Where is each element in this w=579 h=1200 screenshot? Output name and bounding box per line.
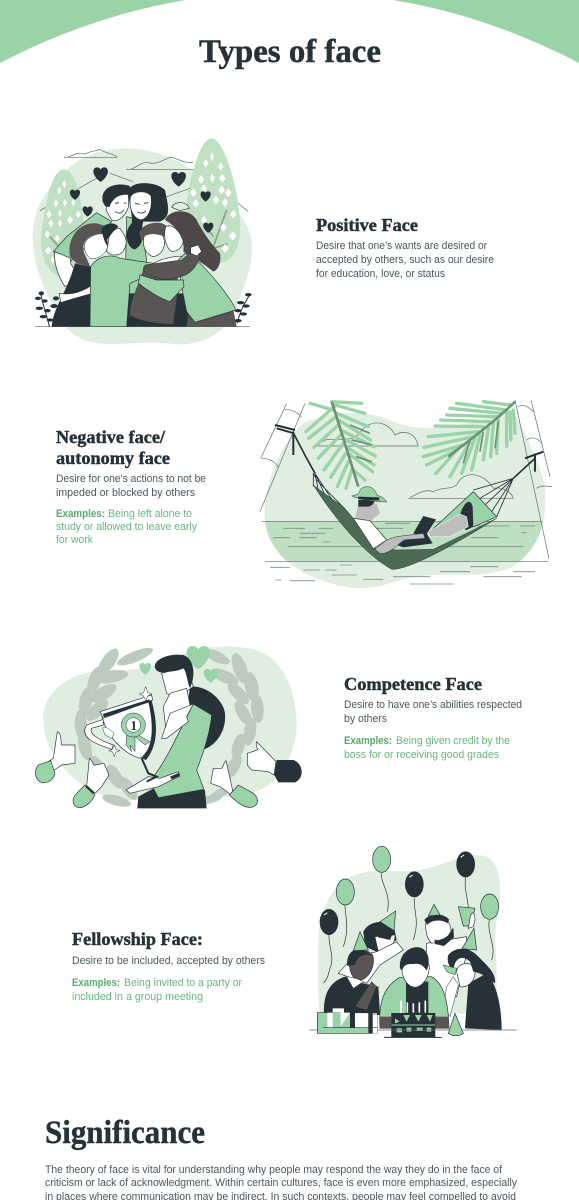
text: fellowship face description: Desire to be included, accepted by others [72,955,265,967]
illustration: woman with trophy [35,644,302,809]
text: fellowship face examples: included in a group meeting [72,991,203,1003]
text: positive face description: accepted by others, such as our desire [316,254,494,266]
heading: positive face: Positive Face [316,215,418,235]
text: negative face examples: for work [56,534,94,546]
text: significance paragraph: The theory of face is vital for understanding why people may respond the way they do in the face of [45,1164,502,1176]
text: negative face examples: Being left alone to [108,508,192,520]
heading: competence face: Competence Face [344,674,482,694]
text: negative face examples: study or allowed to leave early [56,521,198,533]
heading: negative face: Negative face/ [56,427,166,447]
text: fellowship face examples [72,977,242,1003]
text: significance paragraph [45,1164,518,1200]
illustration: man in hammock [260,400,552,588]
text: positive face description: Desire that one’s wants are desired or [316,240,487,252]
heading: fellowship face: Fellowship Face: [72,929,203,949]
header arc left [0,0,186,63]
illustration: woman with trophy: 1 [130,718,137,733]
text: competence face examples: boss for or receiving good grades [344,749,499,761]
text: fellowship face examples: Examples: [72,977,120,989]
text: negative face examples: Examples: [56,508,105,520]
text: negative face description: impeded or blocked by others [56,487,195,499]
text: competence face description: by others [344,713,387,725]
text: competence face examples [344,735,510,761]
title: Types of face [199,34,381,70]
heading: negative face: autonomy face [56,448,170,468]
heading: significance: Significance [45,1115,205,1151]
text: competence face description [344,699,522,725]
header arc right [393,0,579,63]
illustration: friends hugging [33,138,252,344]
text: negative face description [56,473,206,499]
text: competence face examples: Examples: [344,735,392,747]
heading: negative face [56,427,170,468]
text: positive face description: for education, love, or status [316,268,445,280]
text: competence face description: Desire to have one’s abilities respected [344,699,522,711]
text: negative face examples [56,508,198,546]
text: significance paragraph: criticism or lack of acknowledgment. Within certain cultures, face is even more emphasized, especially [45,1177,518,1189]
text: fellowship face examples: Being invited to a party or [124,977,242,989]
text: negative face description: Desire for one’s actions to not be [56,473,206,485]
text: positive face description [316,240,494,280]
text: competence face examples: Being given credit by the [396,735,510,747]
illustration: birthday party [309,846,517,1037]
